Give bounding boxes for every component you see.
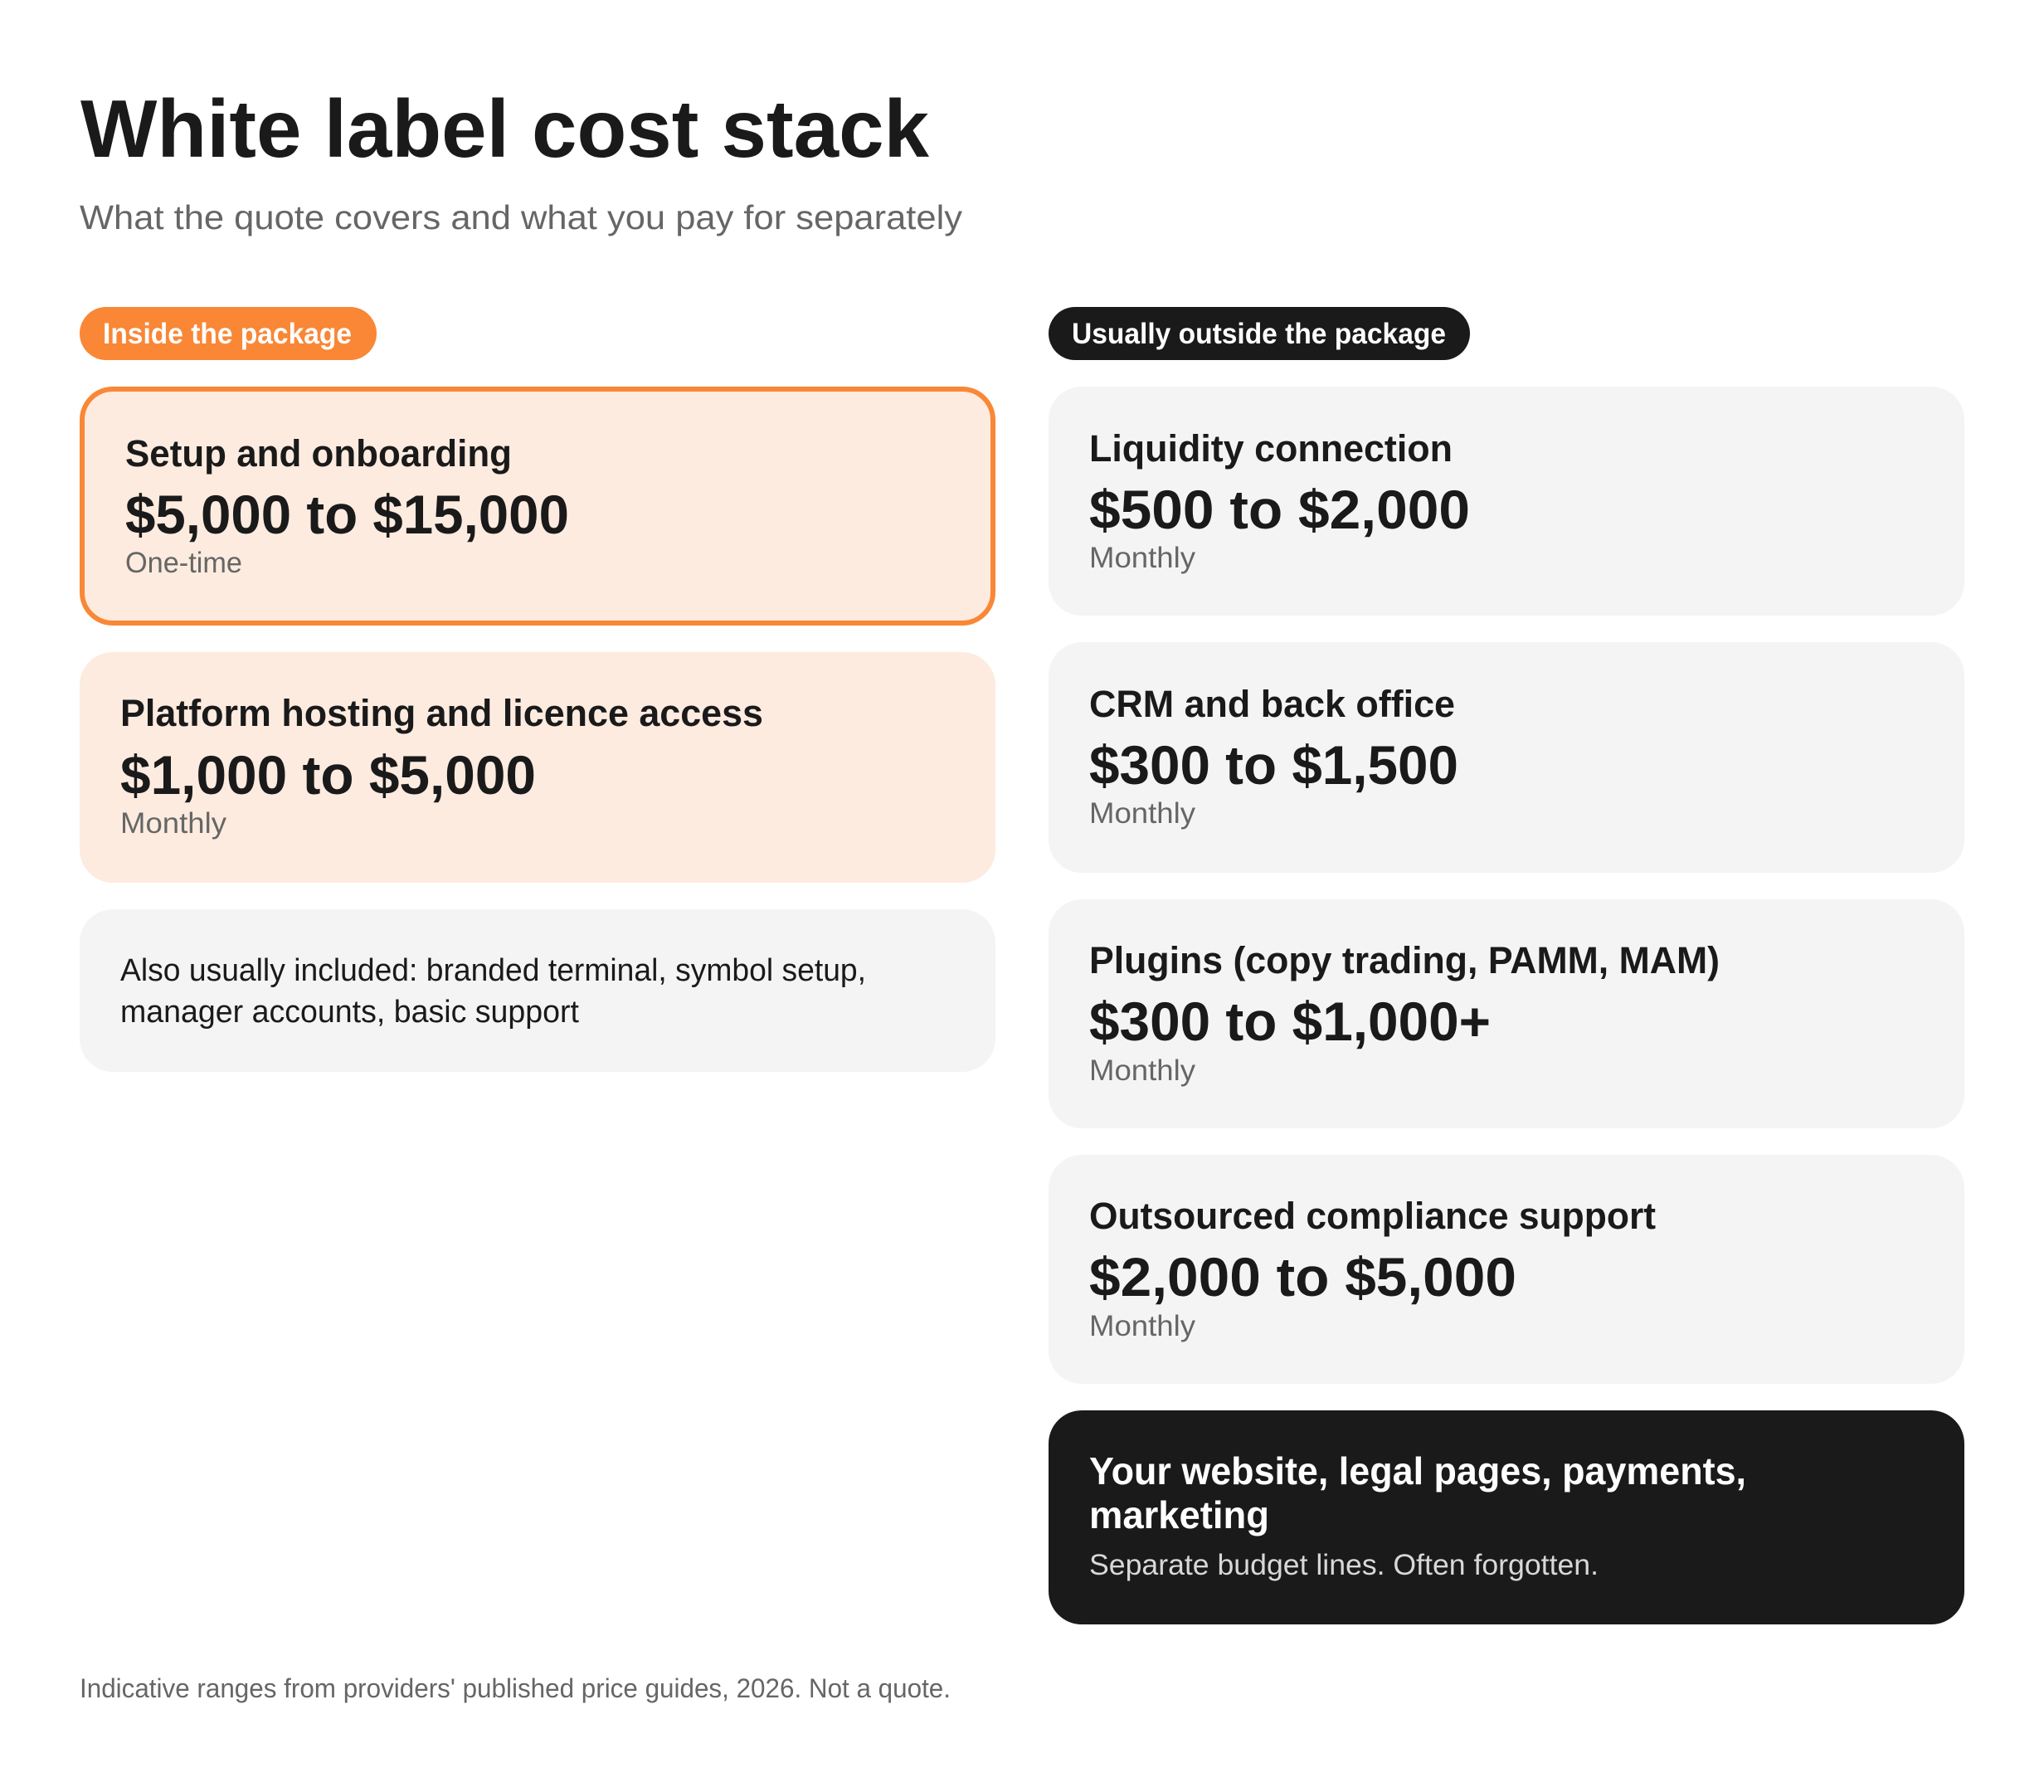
card: outsourced compliance support: Monthly (1089, 1310, 1196, 1342)
card: also usually included: Also usually included: branded terminal, symbol setup, (120, 953, 866, 988)
footnote: Indicative ranges from providers' published price guides, 2026. Not a quote. (80, 1673, 951, 1703)
badge: usually outside the package (1049, 307, 1470, 360)
card: setup and onboarding (82, 389, 993, 623)
card: also usually included: manager accounts, basic support (120, 995, 579, 1030)
badge: usually outside the package: Usually outside the package (1072, 318, 1446, 350)
card: liquidity connection (1049, 387, 1964, 616)
card: outsourced compliance support (1049, 1155, 1964, 1384)
card: setup and onboarding: One-time (125, 547, 242, 579)
card: plugins (1049, 899, 1964, 1128)
card: your website, legal pages, payments, marketing: marketing (1089, 1493, 1269, 1536)
card: plugins: Plugins (copy trading, PAMM, MAM) (1089, 939, 1720, 981)
card: outsourced compliance support: $2,000 to $5,000 (1089, 1246, 1516, 1307)
card: CRM and back office: CRM and back office (1089, 683, 1455, 725)
card: also usually included (80, 909, 995, 1072)
badge: inside the package: Inside the package (103, 318, 352, 350)
card: liquidity connection: Liquidity connection (1089, 427, 1453, 470)
card: your website, legal pages, payments, marketing (1049, 1410, 1964, 1624)
card: your website, legal pages, payments, marketing: Your website, legal pages, payments, (1089, 1449, 1746, 1493)
card: plugins: Monthly (1089, 1054, 1196, 1087)
card: CRM and back office (1049, 642, 1964, 873)
card: your website, legal pages, payments, marketing: Separate budget lines. Often forgotten. (1089, 1549, 1599, 1581)
card: CRM and back office: $300 to $1,500 (1089, 734, 1458, 796)
card: setup and onboarding: $5,000 to $15,000 (125, 484, 569, 545)
subtitle: What the quote covers and what you pay for separately (80, 198, 963, 236)
card: setup and onboarding: Setup and onboarding (125, 432, 512, 475)
card: plugins: $300 to $1,000+ (1089, 991, 1491, 1052)
card: liquidity connection: $500 to $2,000 (1089, 479, 1470, 540)
card: platform hosting and licence access: Platform hosting and licence access (120, 692, 763, 734)
card: platform hosting and licence access (80, 652, 995, 883)
card: liquidity connection: Monthly (1089, 542, 1196, 574)
title: White label cost stack (80, 83, 929, 174)
card: CRM and back office: Monthly (1089, 797, 1196, 830)
card: platform hosting and licence access: Monthly (120, 807, 227, 840)
card: outsourced compliance support: Outsourced compliance support (1089, 1195, 1656, 1237)
badge: inside the package (80, 307, 377, 360)
card: platform hosting and licence access: $1,000 to $5,000 (120, 744, 536, 806)
